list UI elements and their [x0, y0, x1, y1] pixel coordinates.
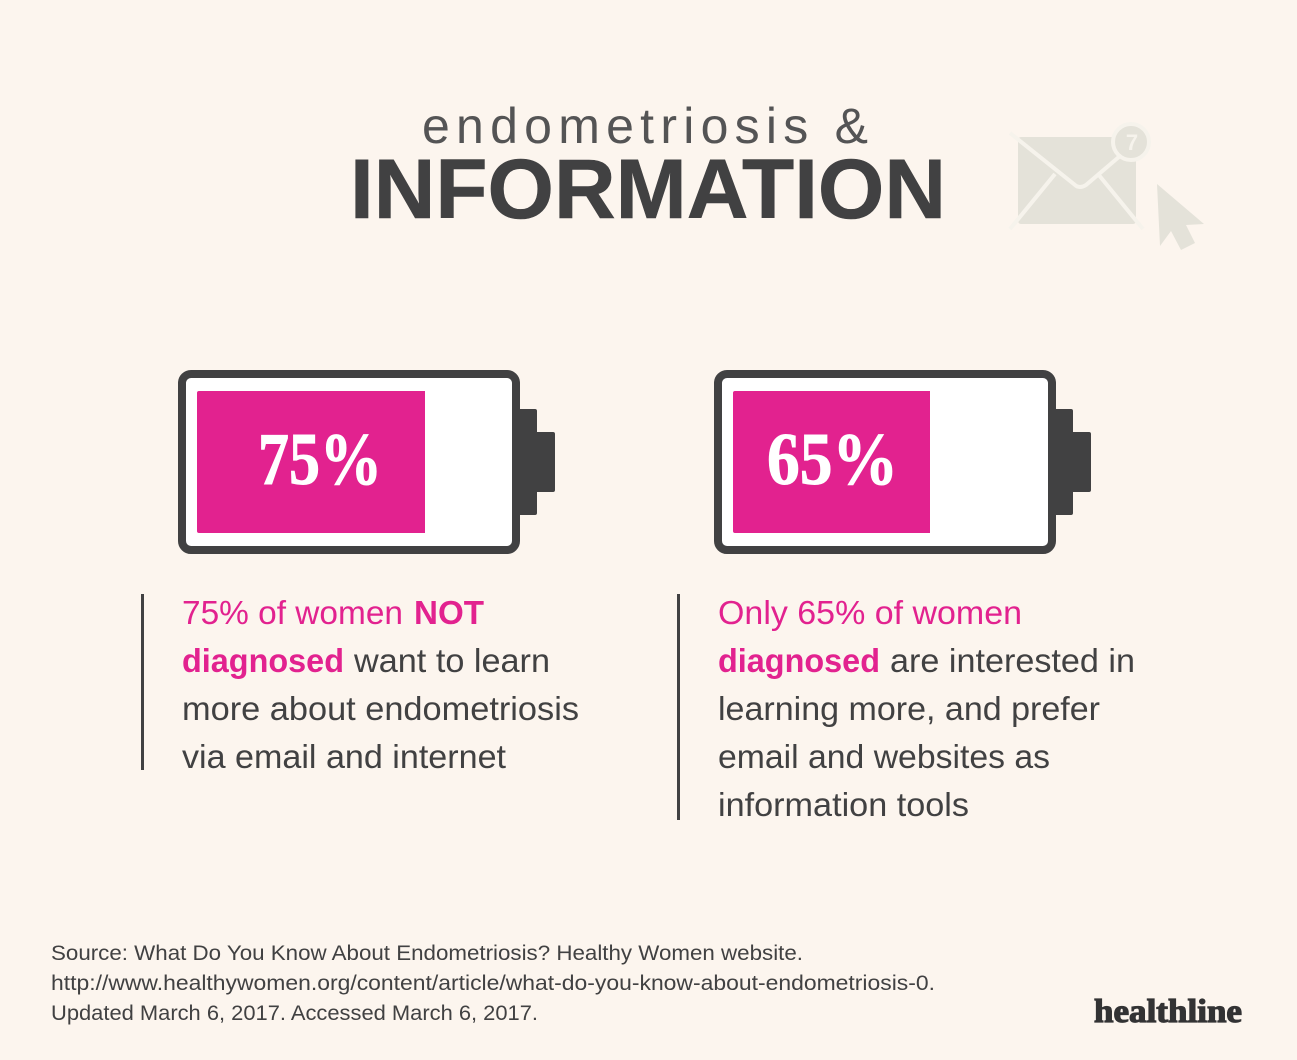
text block: women not diagnosed: diagnosed [182, 642, 344, 679]
text block: women diagnosed: information tools [718, 786, 969, 823]
source citation [51, 942, 935, 1025]
text block: women diagnosed: Only 65% of women [718, 594, 1022, 631]
healthline logo: healthline [1094, 994, 1242, 1030]
text block: women not diagnosed: 75% of women [182, 594, 403, 631]
text block: women not diagnosed [141, 594, 579, 775]
source citation: http://www.healthywomen.org/content/article/what-do-you-know-about-endometriosis-0. [51, 972, 935, 995]
text block: women not diagnosed: via email and internet [182, 738, 506, 775]
text block: women diagnosed: learning more, and prefer [718, 690, 1100, 727]
title [350, 98, 946, 236]
battery: 75%: 75% [258, 419, 382, 501]
text block: women diagnosed [677, 594, 1135, 823]
battery: 65% [718, 374, 1091, 550]
battery: 65%: 65% [767, 419, 898, 501]
icon: email envelope with notification and cursor [1010, 124, 1204, 250]
text block: women diagnosed: are interested in [890, 642, 1135, 679]
text block: women diagnosed: diagnosed [718, 642, 880, 679]
title: INFORMATION [350, 142, 946, 236]
text block: women not diagnosed: more about endometriosis [182, 690, 579, 727]
title: endometriosis & [422, 98, 868, 154]
source citation: Source: What Do You Know About Endometriosis? Healthy Women website. [51, 942, 803, 965]
text block: women diagnosed: email and websites as [718, 738, 1050, 775]
source citation: Updated March 6, 2017. Accessed March 6, 2017. [51, 1002, 538, 1025]
icon: email envelope with notification and cursor: 7 [1126, 130, 1138, 155]
battery: 75% [182, 374, 555, 550]
text block: women not diagnosed: want to learn [353, 642, 550, 679]
text block: women not diagnosed: NOT [414, 594, 484, 631]
